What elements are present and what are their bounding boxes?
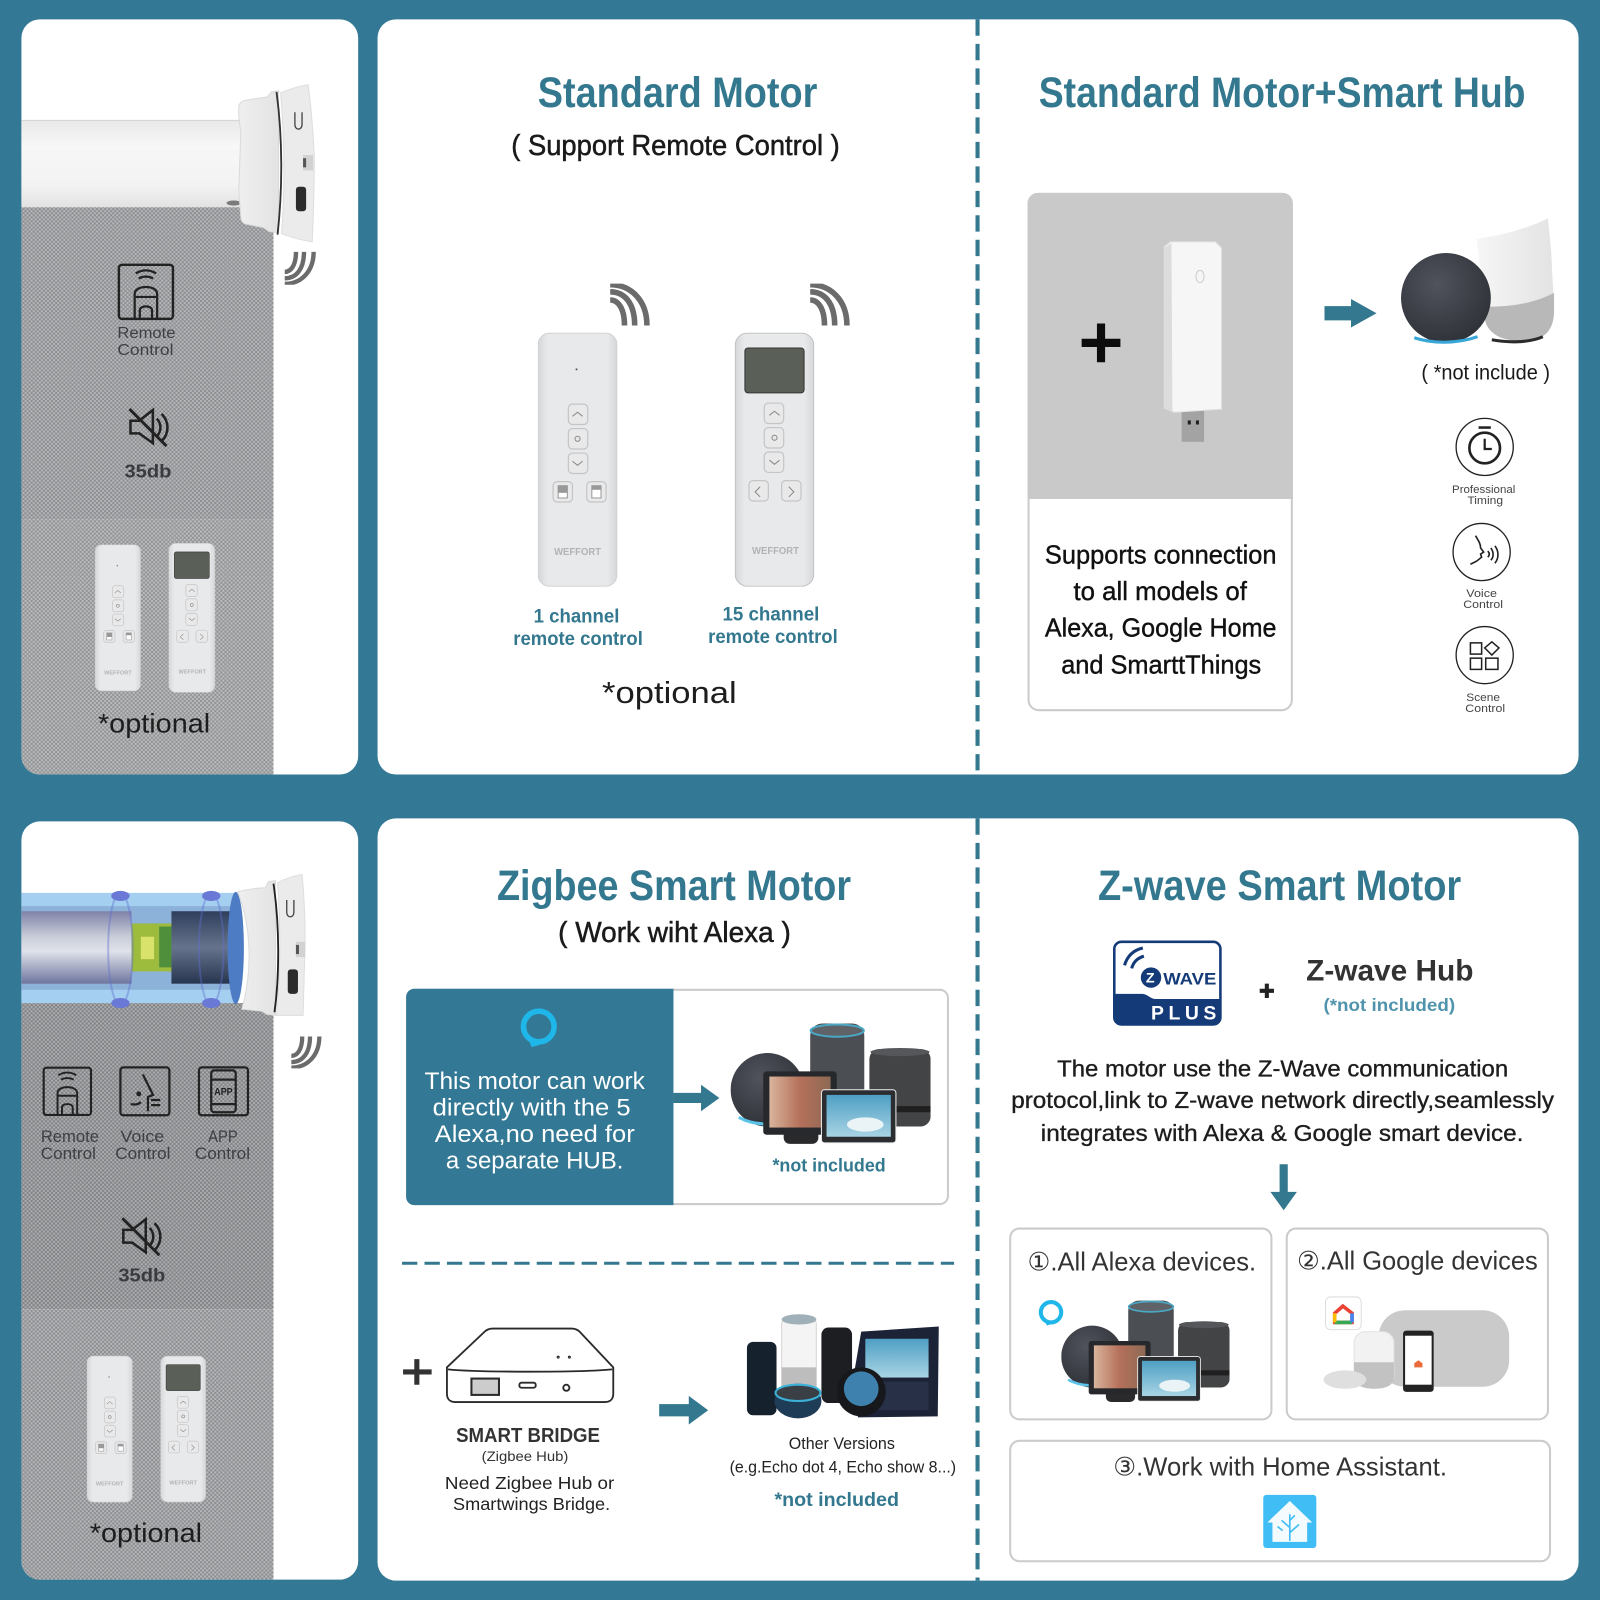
illustration: usb hub [1164, 242, 1221, 442]
text: z-wave description [1011, 1056, 1554, 1146]
icon: voice control [1453, 523, 1510, 581]
label: optional: *optional [90, 1518, 202, 1548]
illustration: roller tube and motor head [21, 85, 314, 242]
card: home assistant: ③.Work with Home Assistant. [1113, 1454, 1447, 1482]
logo: z-wave plus: Z [1146, 971, 1155, 987]
label: scene control: Control [1465, 703, 1505, 715]
label: voice control: Control [115, 1144, 170, 1163]
label: not included: *not included [772, 1154, 886, 1175]
label: one channel remote [513, 605, 643, 650]
card: alexa devices [1010, 1229, 1271, 1419]
text: hub need: Smartwings Bridge. [453, 1494, 610, 1514]
remote: fifteen channel [735, 333, 814, 586]
label: remote control: Control [117, 342, 173, 359]
label: optional: *optional [602, 676, 737, 710]
text: direct alexa [424, 1068, 646, 1174]
panel: zigbee and z-wave motors [378, 818, 1579, 1581]
label: remote control: Remote [117, 325, 176, 342]
icon: mute [129, 409, 167, 446]
label: not included: (*not included) [1323, 995, 1455, 1015]
icon: voice control [120, 1067, 169, 1115]
heading: zigbee smart motor: Zigbee Smart Motor [497, 862, 851, 910]
icon: google home app [1326, 1297, 1361, 1330]
icon: scene control [1456, 627, 1513, 684]
label: optional: *optional [98, 709, 210, 739]
subheading: support remote control: ( Support Remote Control ) [511, 130, 840, 162]
illustration: alexa devices [1061, 1301, 1230, 1402]
text: hub support: Supports connection [1045, 539, 1277, 569]
logo: z-wave plus [1113, 942, 1221, 1026]
card: alexa devices: ①.All Alexa devices. [1028, 1248, 1256, 1276]
text: direct alexa: This motor can work [424, 1068, 646, 1095]
text: hub support [1045, 539, 1277, 679]
text: z-wave description: protocol,link to Z-wave network directly,seamlessly [1011, 1087, 1554, 1113]
label: remote control [41, 1127, 99, 1163]
label: app control [195, 1127, 250, 1163]
remote: one channel [538, 333, 617, 586]
heading: standard motor: Standard Motor [538, 69, 818, 117]
label: not include: ( *not include ) [1421, 361, 1550, 385]
icon: remote control [119, 265, 173, 319]
icon: home assistant [1263, 1495, 1316, 1548]
illustration: smart speakers [1401, 218, 1554, 343]
arrow: alexa to devices [673, 1085, 719, 1111]
label: app control: Control [195, 1144, 250, 1163]
label: 35db: 35db [118, 1265, 165, 1286]
text: direct alexa: a separate HUB. [446, 1147, 623, 1174]
illustration: motor cutaway [21, 874, 305, 1015]
remote: fifteen channel small: WEFFORT [179, 669, 207, 675]
icon: mute [122, 1218, 160, 1255]
label: professional timing: Professional [1452, 484, 1515, 496]
heading: standard motor plus smart hub: Standard Motor+Smart Hub [1039, 69, 1526, 117]
label: scene control [1465, 692, 1505, 715]
label: z-wave hub: Z-wave Hub [1306, 955, 1473, 988]
icon: remote control [44, 1068, 91, 1115]
label: scene control: Scene [1466, 692, 1500, 704]
label: fifteen channel remote: 15 channel [722, 603, 819, 625]
illustration: smart bridge [447, 1329, 613, 1402]
remote: one channel small [87, 1356, 132, 1502]
icon: app control [199, 1067, 248, 1115]
icon: wireless signal [285, 252, 314, 284]
text: other versions: (e.g.Echo dot 4, Echo show 8...) [730, 1458, 956, 1476]
remote: fifteen channel: WEFFORT [752, 546, 799, 557]
panel: standard motor shade [21, 19, 358, 774]
label: 35db: 35db [124, 461, 171, 482]
card: google devices: ②.All Google devices [1297, 1247, 1538, 1275]
remote: one channel small: WEFFORT [104, 670, 133, 676]
text: other versions: Other Versions [789, 1435, 895, 1453]
icon: plus [1260, 984, 1274, 998]
icon: signal two [810, 285, 847, 326]
text: hub support: to all models of [1073, 576, 1248, 606]
label: fifteen channel remote [708, 603, 838, 648]
card: google devices [1287, 1229, 1548, 1419]
text: hub support: and SmarttThings [1061, 649, 1261, 679]
illustration: google devices [1323, 1310, 1509, 1392]
label: professional timing [1452, 484, 1515, 507]
icon: alexa ring [523, 1011, 554, 1047]
icon: wireless signal [291, 1036, 319, 1068]
text: other versions [730, 1435, 956, 1476]
label: remote control: Control [41, 1144, 96, 1163]
card: home assistant [1010, 1441, 1550, 1561]
text: direct alexa: Alexa,no need for [435, 1121, 635, 1148]
arrow: down [1270, 1164, 1297, 1210]
label: one channel remote: remote control [513, 628, 643, 650]
arrow: hub to speakers [1324, 299, 1377, 328]
remote: fifteen channel small: WEFFORT [169, 1481, 198, 1487]
panel: smart motor shade [21, 821, 358, 1580]
label: fifteen channel remote: remote control [708, 626, 838, 648]
logo: z-wave plus: PLUS [1151, 1002, 1216, 1024]
label: not included: *not included [774, 1489, 899, 1511]
arrow: bridge to devices [659, 1396, 708, 1424]
label: zigbee hub: (Zigbee Hub) [482, 1449, 568, 1465]
label: voice control: Voice [1466, 588, 1497, 600]
label: voice control [115, 1127, 170, 1163]
illustration: other echo devices [747, 1314, 939, 1418]
label: professional timing: Timing [1467, 495, 1503, 507]
label: remote control [117, 325, 176, 359]
text: z-wave description: The motor use the Z-Wave communication [1057, 1056, 1508, 1082]
panel: standard motor and smart hub [378, 19, 1579, 774]
card: direct alexa [406, 989, 948, 1205]
subheading: work with alexa: ( Work wiht Alexa ) [558, 917, 791, 949]
icon: plus [403, 1359, 432, 1385]
text: hub need: Need Zigbee Hub or [445, 1473, 614, 1493]
remote: one channel small: WEFFORT [96, 1482, 124, 1488]
remote: fifteen channel small [169, 543, 215, 692]
label: voice control [1463, 588, 1503, 611]
text: direct alexa: directly with the 5 [433, 1094, 631, 1121]
icon: plus [1082, 323, 1120, 362]
remote: fifteen channel small [160, 1356, 206, 1502]
label: app control: APP [208, 1127, 238, 1146]
remote: one channel: WEFFORT [554, 547, 601, 558]
text: hub support: Alexa, Google Home [1045, 613, 1277, 643]
logo: z-wave plus: WAVE [1163, 971, 1216, 989]
icon: alexa ring [1041, 1302, 1061, 1326]
label: one channel remote: 1 channel [534, 605, 619, 627]
label: smart bridge: SMART BRIDGE [456, 1425, 600, 1447]
label: voice control: Control [1463, 599, 1503, 611]
illustration: alexa devices [731, 1023, 931, 1144]
text: hub need [445, 1473, 614, 1514]
text: z-wave description: integrates with Alexa & Google smart device. [1041, 1120, 1523, 1146]
label: voice control: Voice [120, 1127, 164, 1146]
card: hub dongle [1028, 193, 1293, 710]
icon: app control: APP [214, 1087, 233, 1098]
label: remote control: Remote [41, 1127, 99, 1146]
heading: z-wave smart motor: Z-wave Smart Motor [1098, 862, 1462, 910]
icon: professional timing [1456, 418, 1513, 476]
remote: one channel small [95, 545, 141, 691]
icon: signal one [610, 285, 647, 326]
